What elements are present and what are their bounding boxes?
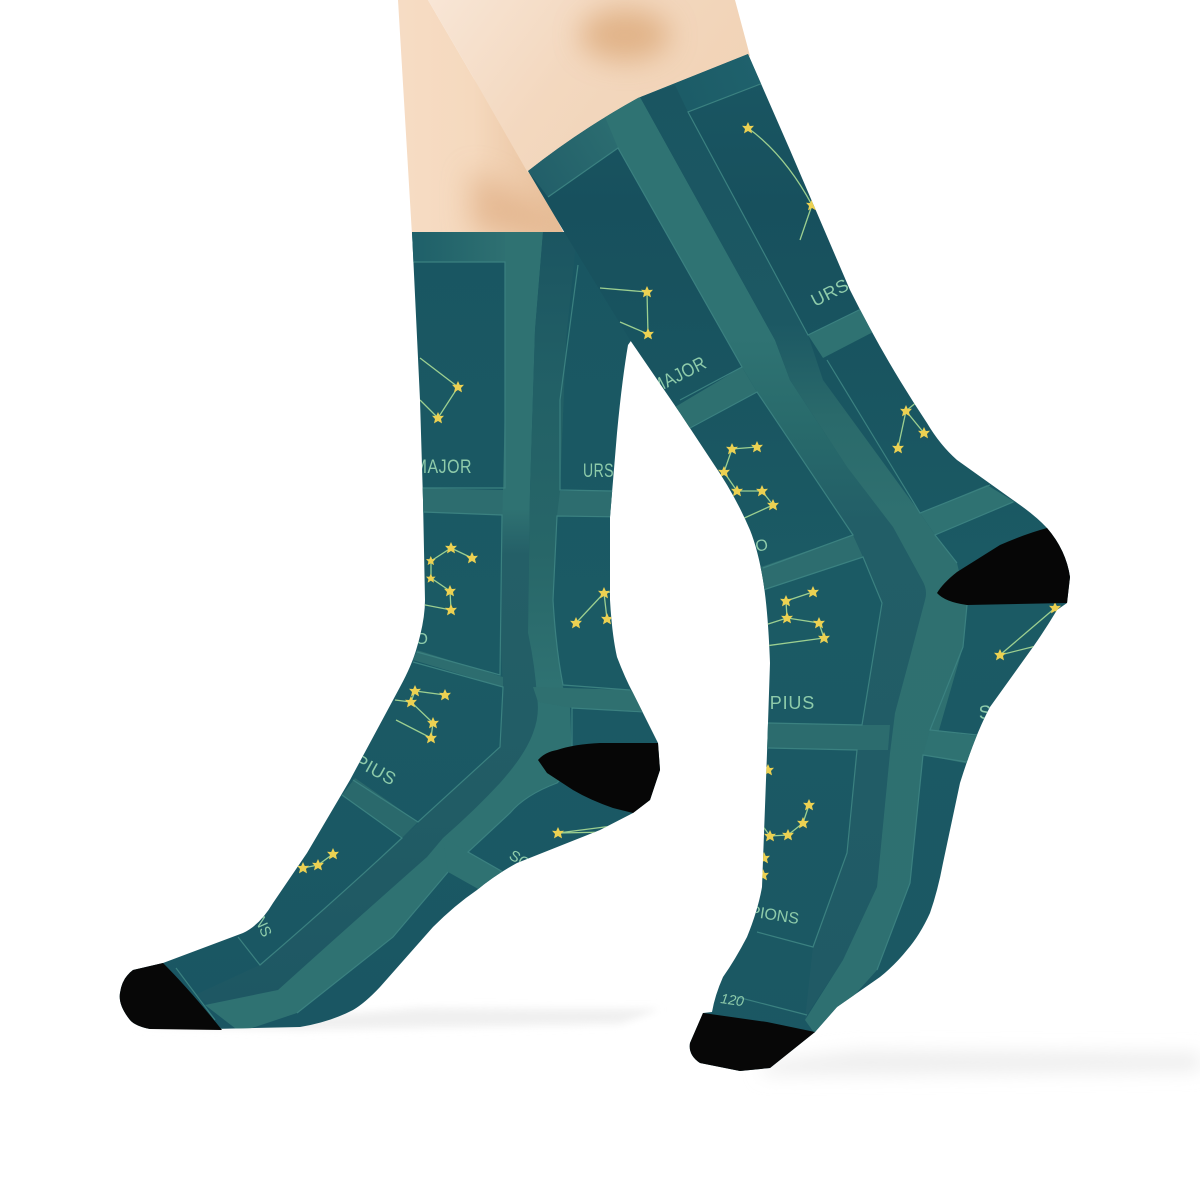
- lower crossing band left: [760, 723, 890, 750]
- right sock pattern: [528, 54, 1093, 1034]
- label: SCORPIONS (foot): SCORPIONS: [223, 850, 275, 940]
- upper crossing band left: [676, 368, 756, 428]
- constellation: Leo (right sock): [892, 395, 930, 453]
- right toe: [690, 1013, 815, 1071]
- constellation: Ursa Major top (right sock): [742, 122, 818, 240]
- right sock: [528, 54, 1093, 1071]
- right sock body: [528, 54, 1070, 1071]
- ground shadow: right foot: [760, 1052, 1200, 1074]
- constellation: foot side: [552, 826, 608, 838]
- left heel: [538, 743, 660, 813]
- label: MAJOR (right sock): URSA MAJOR: [601, 352, 710, 421]
- constellation: Scorpius (left sock): [395, 685, 451, 743]
- cuff band right: [638, 54, 761, 106]
- label: URSA: URSA MAJOR: [583, 460, 679, 482]
- constellation: Ursa Major lower (right sock): [600, 286, 654, 339]
- ground shadow: left foot: [130, 1008, 660, 1030]
- vertical band, light at cuff then ribbed to toe: [502, 232, 543, 640]
- cuff band left: [528, 98, 638, 197]
- constellation: Scorpions (right foot): [757, 764, 815, 880]
- left leg: [398, 0, 565, 235]
- left sock: [120, 232, 679, 1032]
- lower crossing band right: [925, 732, 977, 764]
- left toe: [120, 963, 222, 1030]
- left sock pattern: [176, 232, 679, 1032]
- constellation: Virgo (left sock): [420, 542, 478, 615]
- label: S (foot side): SCORPIONS: [506, 847, 591, 909]
- label: SCORPIUS (left sock): SCORPIUS: [304, 724, 400, 789]
- ankle crossing band: [413, 650, 503, 687]
- horizontal band right: [557, 491, 612, 516]
- second vertical band, dark at cuff then light around heel: [205, 386, 572, 1028]
- second vertical band, dark at cuff then light around heel: [640, 85, 967, 1034]
- middle crossing band left: [760, 536, 862, 589]
- right leg: [428, 0, 750, 173]
- label: SCORPIUS (right sock): SCORPIUS: [715, 693, 815, 713]
- constellation: heel side: [994, 602, 1061, 660]
- lower crossing band: [533, 687, 642, 712]
- constellation: Virgo (right sock): [718, 441, 779, 520]
- constellation: Leo (left sock): [570, 587, 612, 628]
- label: VIRGO (right sock): VIRGO: [716, 536, 770, 565]
- constellation: Scorpius (right sock): [765, 586, 830, 646]
- horizontal band left: [422, 488, 503, 514]
- label: URSA (right sock): URSA MAJOR: [808, 237, 926, 311]
- middle crossing band right: [920, 485, 1015, 535]
- top cuff band: [412, 232, 505, 262]
- foot crossing band: [448, 852, 502, 889]
- panel outlines: [176, 262, 645, 1020]
- vertical band, light at cuff then ribbed to toe: [606, 97, 880, 513]
- constellation: Ursa Major (left sock): [420, 358, 464, 423]
- label: S (heel side): SCORPIONS: [978, 697, 1093, 724]
- label: SCORPIONS (right foot): SCORPIONS: [703, 896, 800, 928]
- instep crossing band: [342, 778, 418, 838]
- upper crossing band right: [808, 310, 872, 358]
- constellation: small dipper on foot: [297, 848, 339, 873]
- right heel: [937, 528, 1070, 605]
- label: MAJOR: URSA MAJOR: [363, 456, 472, 477]
- label: VIRGO: VIRGO: [376, 631, 428, 648]
- panel outlines: [548, 83, 1013, 1015]
- label: 120: 120: [720, 990, 745, 1009]
- left sock body: [120, 232, 660, 1029]
